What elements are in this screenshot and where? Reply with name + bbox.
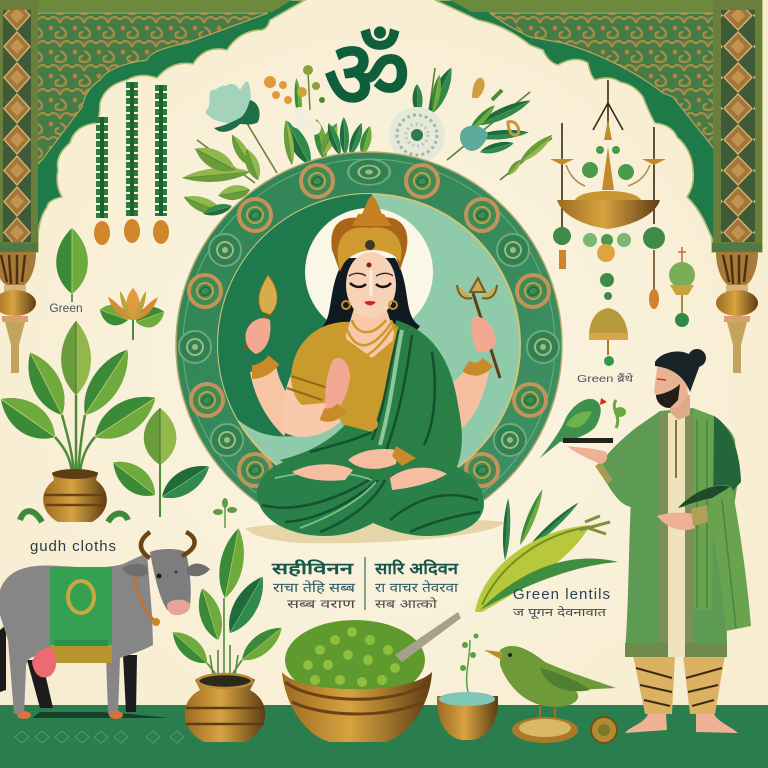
bird on plate <box>540 398 626 458</box>
arch frame: left <box>0 0 305 252</box>
sari <box>280 320 462 482</box>
hem <box>625 643 727 657</box>
label: gudh cloths: gudh cloths <box>30 538 116 555</box>
pale lotus <box>205 81 260 132</box>
ground shadow <box>32 712 170 718</box>
central foliage <box>279 72 375 169</box>
hooves <box>17 711 31 719</box>
goddess figure <box>244 195 505 543</box>
mandala ring <box>176 152 562 538</box>
torso and blouse <box>291 320 398 432</box>
left raised arm <box>250 366 298 436</box>
ground shadow <box>245 518 505 543</box>
label: Green (right): Green ब्रैंथे <box>577 373 634 385</box>
label text block: राचा तेहि सब्ब <box>273 580 356 595</box>
lower bird <box>484 646 616 722</box>
pot <box>43 469 107 522</box>
body <box>0 553 153 714</box>
label text block: सब आत्को <box>375 597 438 611</box>
feet <box>625 714 738 733</box>
label text block: सहीविनन <box>271 559 355 578</box>
neck and head <box>670 395 690 420</box>
orange blossoms <box>264 65 325 104</box>
right capital <box>716 252 758 373</box>
lotus with leaves <box>96 288 168 340</box>
label text block <box>271 557 459 611</box>
far legs <box>27 655 137 712</box>
lamp foliage <box>582 146 634 180</box>
label: Green lentils: Green lentils <box>513 586 610 603</box>
ground ornaments <box>15 731 184 743</box>
left capital <box>0 252 36 373</box>
cow <box>0 532 210 719</box>
hanging lamp <box>550 80 666 309</box>
arch frame: right <box>435 0 762 252</box>
small sprig <box>213 498 237 528</box>
label text block: सारि अदिवन <box>374 559 459 578</box>
right hand and trident <box>457 278 500 378</box>
hanging bell <box>589 308 628 366</box>
hanging ornament <box>669 247 695 327</box>
right spray <box>412 65 555 180</box>
label: Green (left): Green <box>49 301 83 315</box>
feet and resting hands <box>292 464 353 481</box>
corn and lentil pod <box>475 488 618 612</box>
top botanical spray <box>181 65 555 220</box>
left sleeve <box>598 427 643 507</box>
label: lentils sub-caption: ज पूगन देवनावात <box>513 606 607 620</box>
collar <box>135 578 157 623</box>
hair <box>318 258 420 335</box>
man figure <box>567 349 751 733</box>
dhoti <box>633 655 725 714</box>
necklaces <box>340 320 397 428</box>
icon: om symbol: ॐ <box>324 22 410 127</box>
water cup <box>437 634 498 740</box>
left hand <box>567 446 607 464</box>
left hand and flame <box>244 275 277 372</box>
face <box>346 252 396 318</box>
label text block: सब्ब वराण <box>287 597 355 611</box>
centre potted plant <box>166 526 288 742</box>
mudra hand <box>322 358 350 415</box>
white chrysanthemum <box>389 107 445 163</box>
right arm <box>446 368 489 432</box>
left leaf <box>56 228 88 302</box>
lentil bowl <box>282 612 461 742</box>
bottom green band <box>0 705 768 768</box>
inner panel <box>660 413 693 657</box>
right hand <box>657 513 695 530</box>
small plant <box>106 408 215 517</box>
large potted plant <box>0 321 164 522</box>
coin <box>591 717 617 743</box>
udder <box>32 648 56 677</box>
crown <box>331 195 407 272</box>
garlands hanging left <box>94 82 169 245</box>
cow cloth <box>50 567 112 663</box>
head <box>150 549 191 613</box>
left olive branches <box>181 120 277 220</box>
pot <box>185 674 265 742</box>
medallions <box>179 159 559 486</box>
label text block: रा वाचर तेवरवा <box>375 580 459 595</box>
crossed legs <box>257 460 484 536</box>
shawl <box>678 408 751 631</box>
coat <box>625 408 738 657</box>
tail <box>0 625 6 692</box>
hanging foliage <box>553 227 665 300</box>
plate of offerings <box>512 717 578 743</box>
